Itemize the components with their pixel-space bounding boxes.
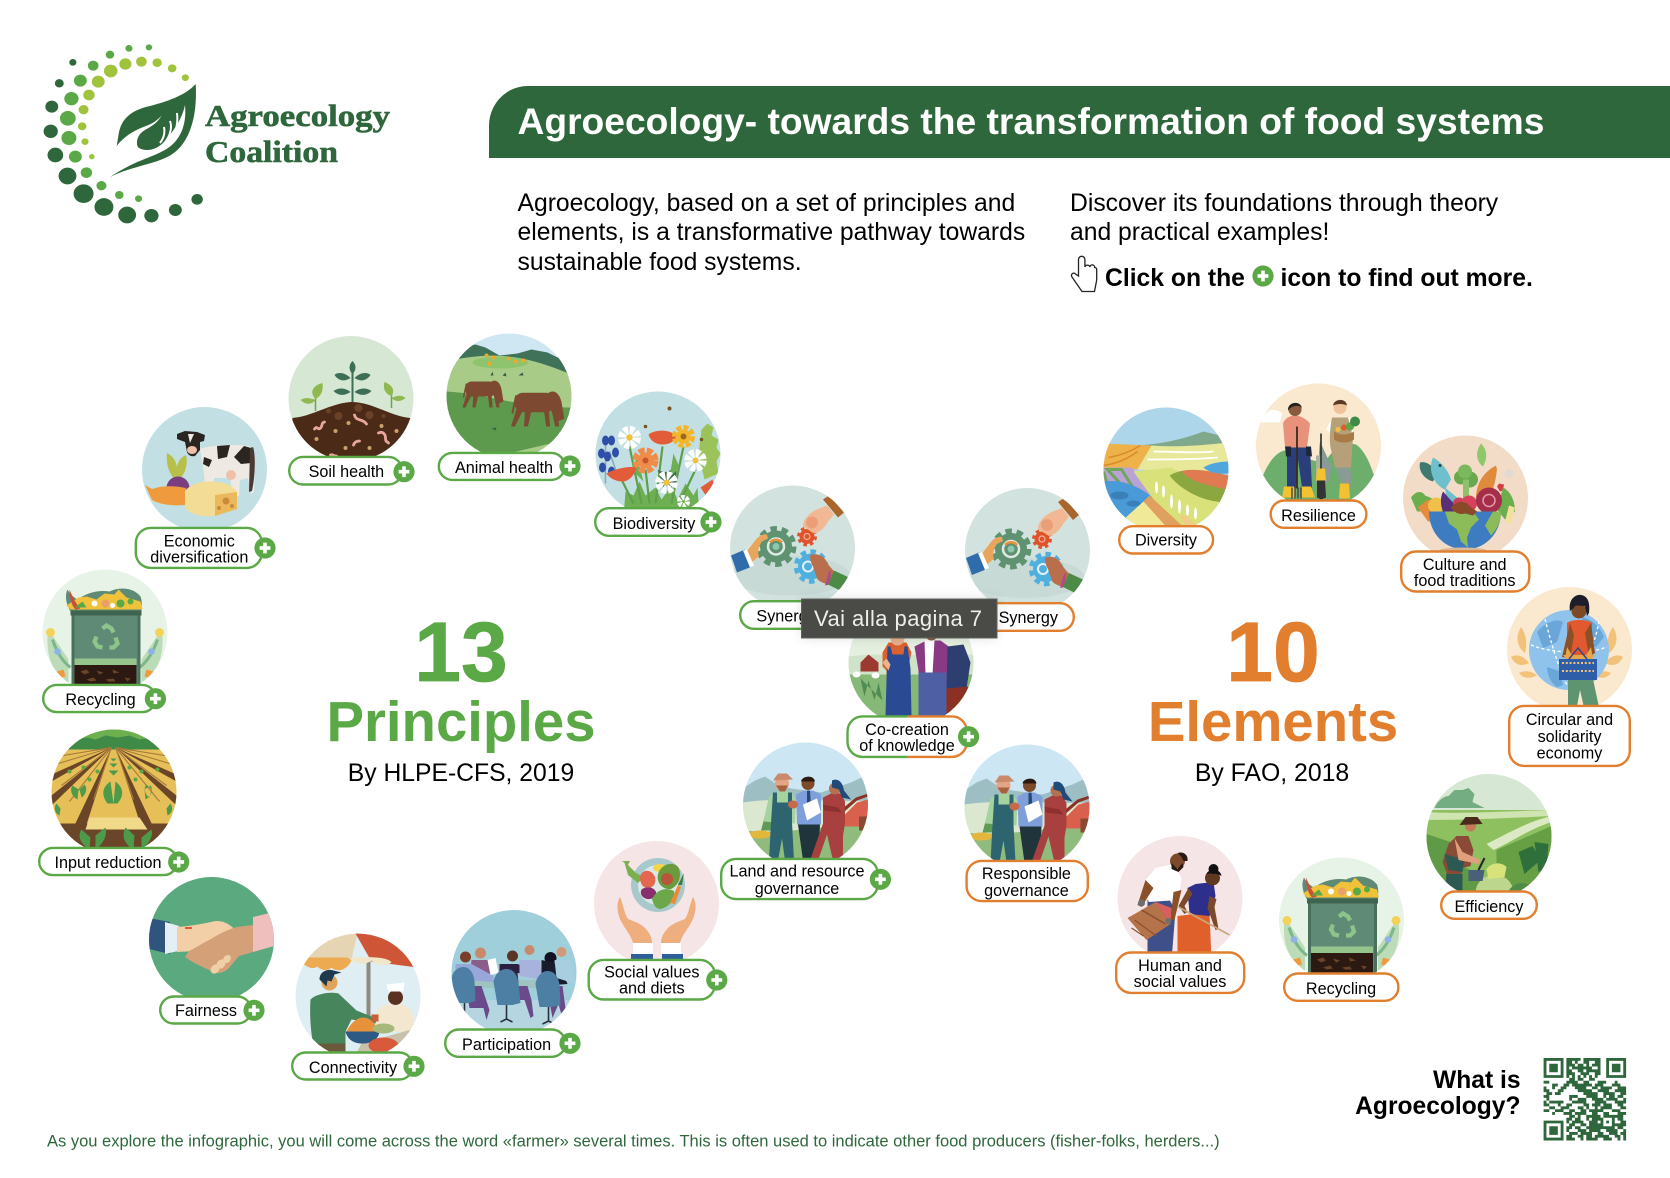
principle: Input reduction xyxy=(39,730,189,875)
icon: patchwork landscape xyxy=(1104,408,1228,532)
label xyxy=(1271,500,1366,528)
icon: hands with gears xyxy=(965,488,1090,613)
label: Recycling xyxy=(65,691,136,709)
label xyxy=(589,960,727,1000)
label: Synergy xyxy=(999,609,1059,627)
label xyxy=(292,1052,425,1080)
element: Efficiency xyxy=(1426,774,1552,919)
label: diversification xyxy=(150,548,248,566)
principle: Economic diversification xyxy=(136,407,276,568)
logo: Agroecology Coalition xyxy=(44,44,391,223)
principle: Biodiversity xyxy=(595,392,722,536)
intro text: right column xyxy=(1070,190,1499,246)
instruction text: icon to find out more. xyxy=(1280,265,1533,292)
label xyxy=(595,508,722,536)
label xyxy=(439,453,581,480)
shared principle and element: Co-creation of knowledge xyxy=(846,638,980,758)
label: Soil health xyxy=(309,463,384,481)
instruction text: Click on the xyxy=(1105,265,1245,292)
icon: cows in a field xyxy=(446,334,572,458)
icon: farmer in a green field xyxy=(1426,774,1552,899)
label: Input reduction xyxy=(54,854,162,872)
icon: three farmers xyxy=(848,638,974,716)
icon: leaf xyxy=(100,84,196,177)
element: Synergy xyxy=(965,488,1090,631)
label: economy xyxy=(1537,744,1603,762)
heading: 13 Principles xyxy=(326,605,596,787)
icon: compost bin xyxy=(1279,858,1404,983)
icon: cow, vegetables and cheese xyxy=(142,407,267,532)
label xyxy=(43,685,166,712)
intro text: right column: Discover its foundations through theory xyxy=(1070,190,1499,217)
label xyxy=(1284,974,1398,1001)
label: solidarity xyxy=(1538,728,1602,746)
element: Circular and solidarity economy xyxy=(1507,587,1632,766)
intro text: right column: and practical examples! xyxy=(1070,219,1329,246)
icon: two farmers xyxy=(1256,384,1381,508)
label xyxy=(1116,952,1244,993)
principle: Fairness xyxy=(149,877,274,1024)
icon: three people by a farm xyxy=(743,742,868,868)
label xyxy=(39,848,189,875)
label xyxy=(289,457,415,484)
heading: 10 Elements: By FAO, 2018 xyxy=(1195,760,1349,787)
icon: wild flowers xyxy=(596,392,720,516)
label xyxy=(136,528,276,568)
label: Co-creation xyxy=(865,721,949,739)
label: Participation xyxy=(462,1036,551,1054)
call to action: What is Agroecology?: What is xyxy=(1433,1067,1520,1094)
principle: Animal health xyxy=(439,334,581,480)
element: Human and social values xyxy=(1116,836,1244,993)
logo wordmark xyxy=(205,98,391,169)
icon: people in a meeting xyxy=(452,910,576,1035)
icon: rows of crops xyxy=(52,730,176,854)
heading: 10 Elements xyxy=(1148,605,1398,787)
principle: Land and resource governance xyxy=(721,742,891,899)
principle: Soil health xyxy=(288,336,415,484)
label xyxy=(160,996,265,1024)
tooltip: Vai alla pagina 7 xyxy=(802,599,997,638)
heading: 10 Elements: Elements xyxy=(1148,690,1398,753)
logo wordmark: Agroecology xyxy=(205,98,391,133)
intro text: left column: sustainable food systems. xyxy=(518,249,802,276)
heading: 10 Elements: 10 xyxy=(1226,605,1320,699)
label xyxy=(1441,892,1537,919)
label: Connectivity xyxy=(309,1059,398,1077)
label: of knowledge xyxy=(859,737,955,755)
label: governance xyxy=(755,880,839,898)
tooltip: Vai alla pagina 7: Vai alla pagina 7 xyxy=(814,606,982,631)
label: food traditions xyxy=(1414,572,1516,590)
label: Biodiversity xyxy=(613,515,696,533)
label: Synergy xyxy=(756,608,817,626)
label: Fairness xyxy=(175,1002,237,1020)
label: and diets xyxy=(619,980,685,998)
label xyxy=(967,861,1088,901)
title banner: Agroecology- towards the transformation of food systems xyxy=(518,100,1544,142)
label: Social values xyxy=(604,964,699,982)
intro text: left column xyxy=(518,190,1025,276)
label xyxy=(721,859,891,899)
principle: Participation xyxy=(445,910,581,1057)
title banner xyxy=(489,86,1670,158)
label: governance xyxy=(984,882,1069,900)
logo wordmark: Coalition xyxy=(205,134,338,169)
footnote: As you explore the infographic, you will come across the word «farmer» several times. This is often used to indicate other food producers (fisher-folks, herders...) xyxy=(47,1132,1220,1150)
label: Animal health xyxy=(455,459,553,477)
label: Economic xyxy=(164,533,235,551)
icon: pointing hand xyxy=(1071,256,1097,292)
element: Diversity xyxy=(1104,408,1228,554)
icon: two farm workers xyxy=(1118,836,1242,961)
element: Culture and food traditions xyxy=(1401,436,1529,592)
heading: 13 Principles: Principles xyxy=(326,690,596,753)
label xyxy=(1401,552,1529,592)
label: Land and resource xyxy=(730,863,864,881)
label: Responsible xyxy=(982,865,1071,883)
label: Diversity xyxy=(1135,532,1198,550)
icon: compost bin xyxy=(42,570,168,695)
label: Culture and xyxy=(1423,556,1507,574)
heading: 13 Principles: By HLPE-CFS, 2019 xyxy=(348,760,574,787)
QR code xyxy=(1544,1059,1626,1139)
label: Human and xyxy=(1138,957,1222,975)
icon: hands holding a salad xyxy=(594,841,719,966)
icon: plus xyxy=(1252,265,1274,287)
intro text: left column: Agroecology, based on a set of principles and xyxy=(518,190,1015,217)
label xyxy=(445,1030,581,1057)
call to action: What is Agroecology?: Agroecology? xyxy=(1355,1093,1520,1120)
call to action: What is Agroecology? xyxy=(1355,1067,1520,1120)
principle: Recycling xyxy=(42,570,168,712)
intro text: left column: elements, is a transformative pathway towards xyxy=(518,219,1025,246)
icon: handshake xyxy=(149,877,274,1002)
label xyxy=(848,716,979,757)
icon: soil with plants and worms xyxy=(288,336,414,461)
element: Resilience xyxy=(1256,384,1381,528)
label: Resilience xyxy=(1281,507,1356,525)
principle: Social values and diets xyxy=(589,841,727,1000)
label: Circular and xyxy=(1526,711,1613,729)
heading: 13 Principles: 13 xyxy=(414,605,508,699)
icon: woman with globe and basket xyxy=(1507,587,1632,712)
principle: Synergy xyxy=(730,486,855,629)
label xyxy=(1119,526,1213,554)
element: Recycling xyxy=(1279,858,1404,1001)
instruction: click on the plus icon xyxy=(1071,256,1533,292)
label xyxy=(1509,706,1630,766)
instruction text xyxy=(1105,265,1533,292)
label: Recycling xyxy=(1306,980,1376,998)
icon: globe bowl of food xyxy=(1403,436,1528,560)
icon: three people by a farm xyxy=(964,744,1090,870)
principle: Connectivity xyxy=(292,934,425,1080)
label xyxy=(740,601,850,629)
icon: market stall xyxy=(296,934,420,1058)
label xyxy=(966,603,1074,631)
icon: hands with gears xyxy=(730,486,855,610)
label: Efficiency xyxy=(1455,898,1524,916)
element: Responsible governance xyxy=(964,744,1090,901)
label: social values xyxy=(1134,973,1226,991)
icon: ring of dots xyxy=(44,44,203,223)
